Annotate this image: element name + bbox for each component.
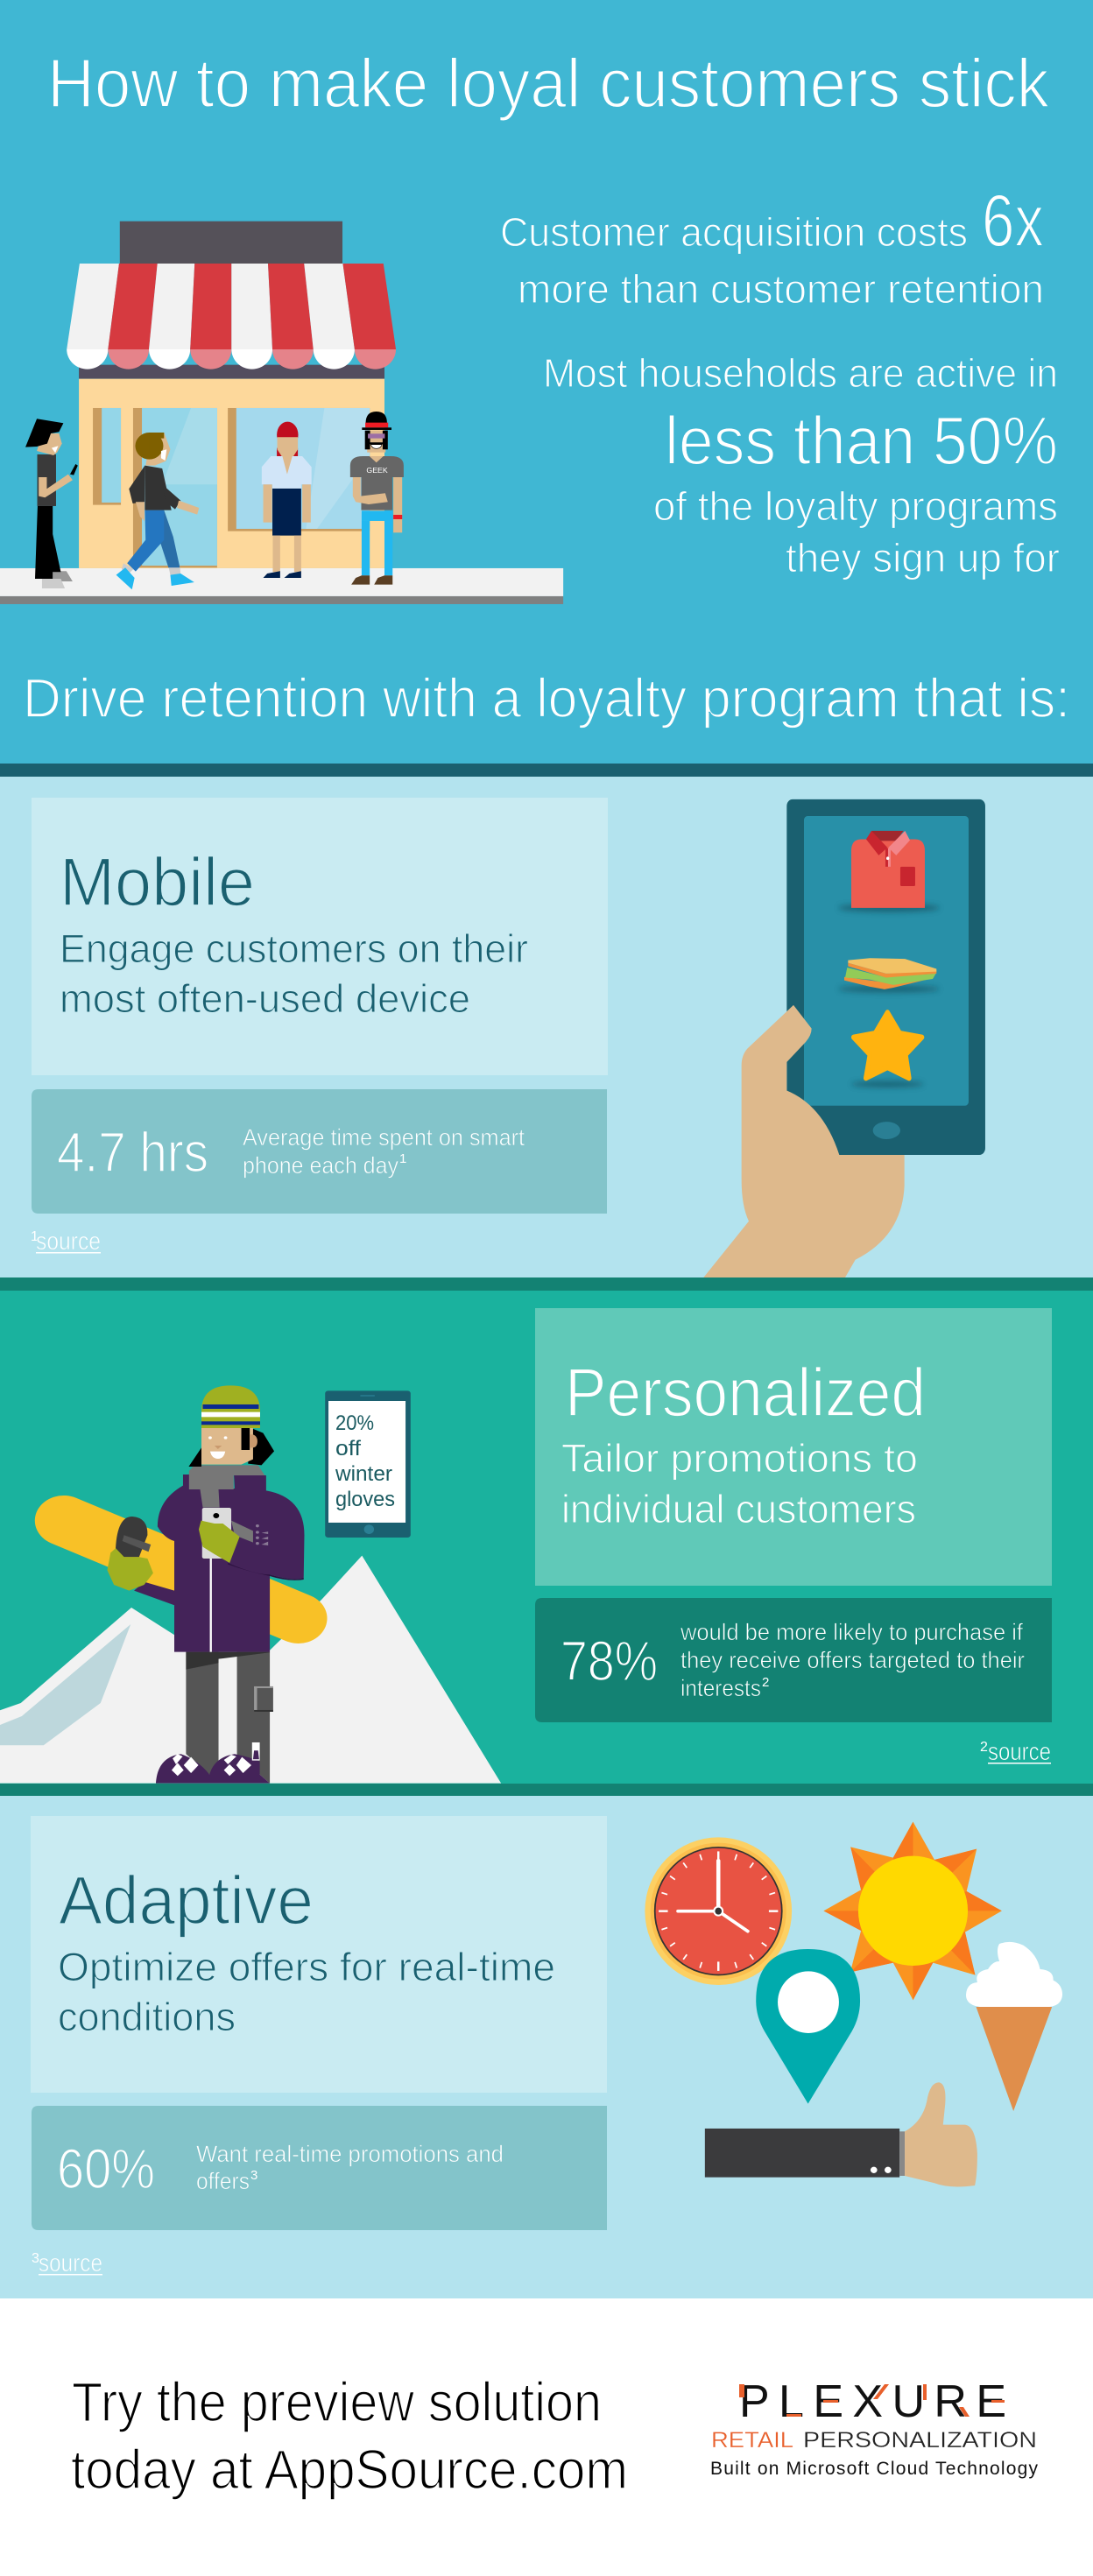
stat: 78%: would be more likely to purchase if xyxy=(680,1619,1023,1645)
stat: 60%: offers xyxy=(196,2168,250,2194)
icon: ice cream xyxy=(966,1942,1062,2111)
stat: 78%: they receive offers targeted to their xyxy=(680,1647,1025,1673)
stat: 4.7 hrs: 4.7 hrs xyxy=(57,1121,208,1184)
card: adaptive heading xyxy=(31,1816,607,2093)
card: personalized heading xyxy=(535,1308,1052,1586)
call to action: today at AppSource.com xyxy=(71,2439,628,2501)
stat: acquisition cost: 6x xyxy=(982,179,1044,262)
stat: acquisition cost xyxy=(500,179,1044,312)
awning xyxy=(67,264,396,370)
illustration: adaptive conditions icons xyxy=(645,1822,1062,2186)
card: adaptive heading: conditions xyxy=(58,1995,236,2039)
stat: 4.7 hrs xyxy=(32,1089,607,1214)
icon: star xyxy=(851,1012,924,1087)
illustration: store front with people xyxy=(0,222,563,604)
panel: adaptive xyxy=(0,1796,1093,2298)
stat: 60%: 3 xyxy=(250,2168,257,2183)
stat: 4.7 hrs: Average time spent on smart xyxy=(243,1124,525,1151)
stat: loyalty programs: less than 50% xyxy=(665,402,1058,479)
card: mobile heading xyxy=(32,798,608,1075)
person: walking man xyxy=(116,433,199,589)
promo phone text: 20% xyxy=(335,1411,374,1435)
stat: 4.7 hrs: 1 xyxy=(399,1151,406,1166)
stat: loyalty programs: they sign up for xyxy=(786,535,1060,581)
heading: drive retention: Drive retention with a loyalty program that is: xyxy=(23,668,1070,729)
source link 2: source xyxy=(988,1738,1051,1766)
stat: 78%: 2 xyxy=(762,1675,769,1690)
card: personalized heading: Personalized xyxy=(565,1354,926,1431)
icon: location pin xyxy=(756,1949,860,2104)
title: How to make loyal customers stick xyxy=(47,44,1049,122)
icon: clock xyxy=(645,1837,792,1985)
card: mobile heading: Mobile xyxy=(60,843,255,920)
source link 3: 3 xyxy=(32,2251,39,2266)
panel: mobile xyxy=(0,777,1093,1277)
stat: 78% xyxy=(535,1598,1052,1722)
person: man with phone xyxy=(25,419,78,588)
person: man in geek t-shirt xyxy=(350,412,404,585)
panel: personalized xyxy=(0,1291,1093,1784)
card: mobile heading: Engage customers on their xyxy=(60,926,528,971)
promo phone text: gloves xyxy=(335,1488,395,1511)
mountains xyxy=(0,1556,501,1784)
person: man in geek t-shirt: GEEK xyxy=(366,467,388,475)
panel: footer xyxy=(0,2298,1093,2576)
icon: shirt xyxy=(838,831,940,911)
source link 1: 1 xyxy=(31,1229,39,1244)
logo: plexure: PLEXURE xyxy=(739,2376,1006,2427)
icon: thumbs up arm xyxy=(705,2082,977,2186)
card: personalized heading: Tailor promotions to xyxy=(561,1436,918,1481)
promo phone text: winter xyxy=(335,1462,392,1486)
stat: 78%: interests xyxy=(680,1675,761,1701)
stat: acquisition cost: Customer acquisition costs xyxy=(500,209,968,255)
stat: acquisition cost: more than customer retention xyxy=(518,266,1044,312)
promo phone frame xyxy=(325,1390,411,1538)
panel: header xyxy=(0,0,1093,764)
illustration: snowboarder with mountains xyxy=(0,1385,501,1784)
stat: 60%: 60% xyxy=(57,2137,155,2200)
stat: loyalty programs: Most households are active in xyxy=(543,350,1058,396)
stat: 4.7 hrs: phone each day xyxy=(243,1152,398,1179)
promo phone text xyxy=(335,1411,395,1511)
source link 3: source xyxy=(39,2249,102,2277)
store door xyxy=(133,408,217,567)
card: adaptive heading: Adaptive xyxy=(59,1862,314,1939)
store left window xyxy=(93,408,121,505)
snowboard xyxy=(64,1521,299,1618)
card: adaptive heading: Optimize offers for real-time xyxy=(58,1945,555,1989)
store right window xyxy=(228,408,370,531)
source link 2: 2 xyxy=(980,1740,988,1755)
card: mobile heading: most often-used device xyxy=(60,976,470,1021)
call to action xyxy=(71,2372,628,2501)
logo: plexure: PERSONALIZATION xyxy=(803,2428,1037,2453)
logo: plexure xyxy=(710,2376,1039,2479)
icon: sun xyxy=(823,1822,1002,2000)
logo: plexure: Built on Microsoft Cloud Technology xyxy=(710,2459,1039,2479)
person: woman in skirt xyxy=(262,422,312,578)
source link 1: source xyxy=(36,1228,101,1256)
icon: hand xyxy=(703,1005,905,1277)
stat: loyalty programs: of the loyalty programs xyxy=(653,483,1058,529)
stat: 60% xyxy=(32,2106,607,2230)
promo phone text: off xyxy=(335,1437,361,1460)
stat: 78%: 78% xyxy=(561,1629,658,1693)
icon: sandwich xyxy=(838,958,940,992)
stat: loyalty programs xyxy=(543,350,1060,581)
illustration: hand holding phone xyxy=(703,799,985,1277)
snowboarder xyxy=(107,1385,304,1784)
card: personalized heading: individual customers xyxy=(561,1487,916,1531)
logo: plexure: RETAIL xyxy=(711,2428,793,2453)
call to action: Try the preview solution xyxy=(72,2372,602,2433)
stat: 60%: Want real-time promotions and xyxy=(196,2141,504,2167)
